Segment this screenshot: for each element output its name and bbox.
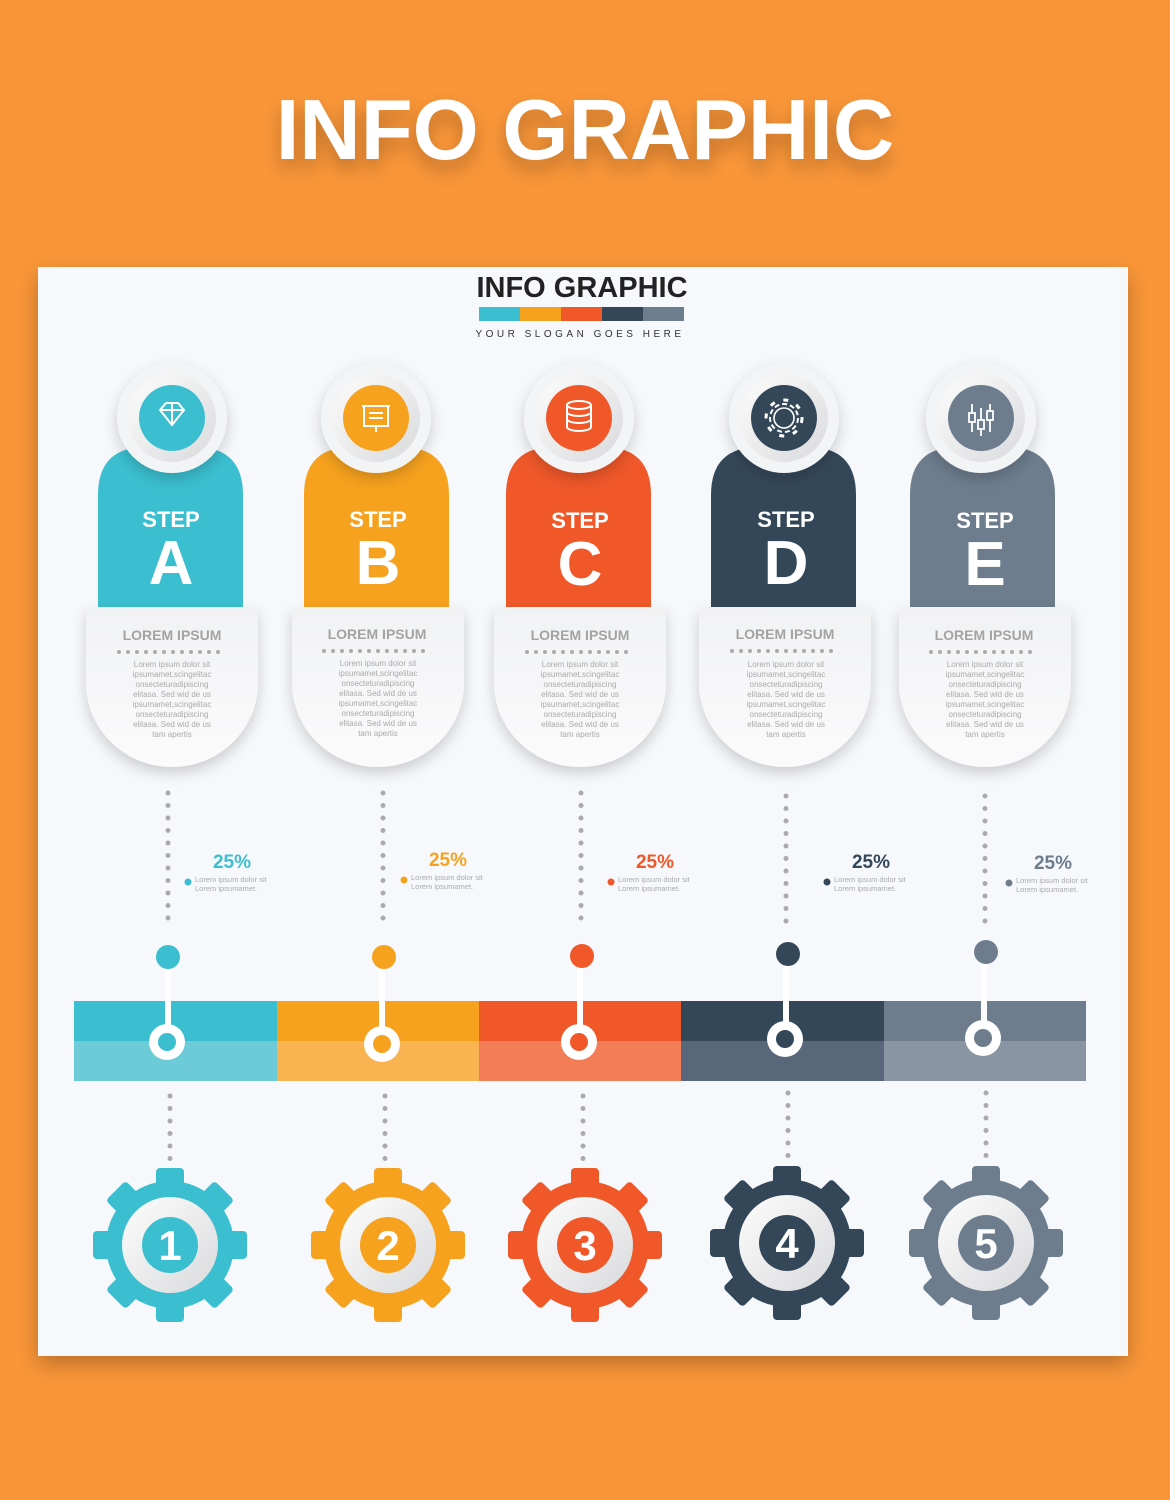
tab A: A <box>149 529 193 598</box>
card D: elitasa. Sed wid de us <box>747 720 825 729</box>
card B: Lorem ipsum dolor sit <box>340 659 417 668</box>
stat C: Lorem ipsum dolor sit <box>618 875 691 884</box>
card E: LOREM IPSUM <box>935 627 1033 643</box>
card A: ipsumamet,scingelitac <box>133 700 211 709</box>
stat E: Lorem ipsumamet. <box>1016 885 1078 894</box>
card A: LOREM IPSUM <box>123 627 221 643</box>
tab B: B <box>356 529 400 598</box>
connector B <box>364 793 400 1165</box>
card D: LOREM IPSUM <box>736 626 834 642</box>
gear 2: 2 <box>376 1222 400 1269</box>
stat D: 25% <box>852 852 890 873</box>
panel: infographic card <box>38 267 1128 1356</box>
card C: elitasa. Sed wid de us <box>541 720 619 729</box>
card E: elitasa. Sed wid de us <box>946 720 1024 729</box>
card A: onsecteturadipiscing <box>136 680 208 689</box>
card E: tam apertis <box>965 730 1005 739</box>
stat D <box>824 852 907 893</box>
stat A <box>184 852 268 893</box>
card B: elitasa. Sed wid de us <box>339 689 417 698</box>
stat B: Lorem ipsum dolor sit <box>411 873 484 882</box>
card D: Lorem ipsum dolor sit <box>748 660 825 669</box>
card E: Lorem ipsum dolor sit <box>947 660 1024 669</box>
gear 5: 5 <box>974 1220 998 1267</box>
connector E <box>965 796 1001 1165</box>
gear 2 <box>311 1168 465 1322</box>
icon D: gear <box>729 363 839 473</box>
gear 1: 1 <box>158 1222 182 1269</box>
card C: ipsumamet,scingelitac <box>541 670 619 679</box>
card E: ipsumamet,scingelitac <box>946 670 1024 679</box>
card A: tam apertis <box>152 730 192 739</box>
main title: INFO GRAPHIC <box>276 83 894 178</box>
card D: tam apertis <box>766 730 806 739</box>
tab D <box>711 447 856 607</box>
icon E: sliders <box>926 363 1036 473</box>
step E column <box>899 363 1089 1320</box>
card C: Lorem ipsum dolor sit <box>542 660 619 669</box>
stat A: Lorem ipsumamet. <box>195 884 257 893</box>
tab B: STEP <box>349 507 407 532</box>
tab B <box>304 447 449 607</box>
card E: elitasa. Sed wid de us <box>946 690 1024 699</box>
card E <box>899 607 1071 767</box>
stat C: Lorem ipsumamet. <box>618 884 680 893</box>
stat D: Lorem ipsumamet. <box>834 884 896 893</box>
stat B: 25% <box>429 850 467 871</box>
tab A: STEP <box>142 507 200 532</box>
card A: onsecteturadipiscing <box>136 710 208 719</box>
gear 3: 3 <box>573 1222 597 1269</box>
stat C <box>608 852 691 893</box>
card C: LOREM IPSUM <box>531 627 629 643</box>
timeline bar <box>74 1001 1086 1081</box>
card B <box>292 607 464 767</box>
gear 1 <box>93 1168 247 1322</box>
gear 4: 4 <box>775 1220 799 1267</box>
card C <box>494 607 666 767</box>
stat B <box>400 850 484 891</box>
tab C: C <box>558 530 602 599</box>
header: small title and slogan: INFO GRAPHIC <box>476 272 688 304</box>
stat C: 25% <box>636 852 674 873</box>
stat E <box>1006 853 1089 894</box>
card E: onsecteturadipiscing <box>949 680 1021 689</box>
card A: ipsumamet,scingelitac <box>133 670 211 679</box>
header: small title and slogan: YOUR SLOGAN GOES HERE <box>475 329 685 340</box>
card C: tam apertis <box>560 730 600 739</box>
card D: elitasa. Sed wid de us <box>747 690 825 699</box>
card A: elitasa. Sed wid de us <box>133 690 211 699</box>
header: small title and slogan <box>475 272 688 340</box>
card C: onsecteturadipiscing <box>544 680 616 689</box>
connector A <box>149 793 185 1165</box>
icon A: diamond <box>117 363 227 473</box>
card B: onsecteturadipiscing <box>342 679 414 688</box>
tab A <box>98 447 243 607</box>
card D: ipsumamet,scingelitac <box>747 670 825 679</box>
card B: tam apertis <box>358 729 398 738</box>
connector C <box>561 793 597 1165</box>
step B column <box>292 363 484 1322</box>
card B: ipsumamet,scingelitac <box>339 669 417 678</box>
card D: onsecteturadipiscing <box>750 710 822 719</box>
stat E: Lorem ipsum dolor sit <box>1016 876 1089 885</box>
gear 4 <box>710 1166 864 1320</box>
card A: Lorem ipsum dolor sit <box>134 660 211 669</box>
step D column <box>699 363 907 1320</box>
icon B: presentation board <box>321 363 431 473</box>
gear 5 <box>909 1166 1063 1320</box>
card A: elitasa. Sed wid de us <box>133 720 211 729</box>
tab E: E <box>964 530 1006 599</box>
card C: ipsumamet,scingelitac <box>541 700 619 709</box>
tab C <box>506 447 651 607</box>
card C: elitasa. Sed wid de us <box>541 690 619 699</box>
card E: ipsumamet,scingelitac <box>946 700 1024 709</box>
card A <box>86 607 258 767</box>
stat A: Lorem ipsum dolor sit <box>195 875 268 884</box>
tab C: STEP <box>551 508 609 533</box>
card D <box>699 607 871 767</box>
stat E: 25% <box>1034 853 1072 874</box>
connector D <box>767 796 803 1165</box>
card E: onsecteturadipiscing <box>949 710 1021 719</box>
gear 3 <box>508 1168 662 1322</box>
card B: onsecteturadipiscing <box>342 709 414 718</box>
card B: LOREM IPSUM <box>328 626 426 642</box>
stat B: Lorem ipsumamet. <box>411 882 473 891</box>
step C column <box>494 363 691 1322</box>
card C: onsecteturadipiscing <box>544 710 616 719</box>
tab D: STEP <box>757 507 815 532</box>
tab E <box>910 447 1055 607</box>
stat D: Lorem ipsum dolor sit <box>834 875 907 884</box>
card D: ipsumamet,scingelitac <box>747 700 825 709</box>
card D: onsecteturadipiscing <box>750 680 822 689</box>
icon C: coins <box>524 363 634 473</box>
tab D: D <box>764 529 808 598</box>
step A column <box>86 363 268 1322</box>
tab E: STEP <box>956 508 1014 533</box>
card B: elitasa. Sed wid de us <box>339 719 417 728</box>
stat A: 25% <box>213 852 251 873</box>
card B: ipsumamet,scingelitac <box>339 699 417 708</box>
